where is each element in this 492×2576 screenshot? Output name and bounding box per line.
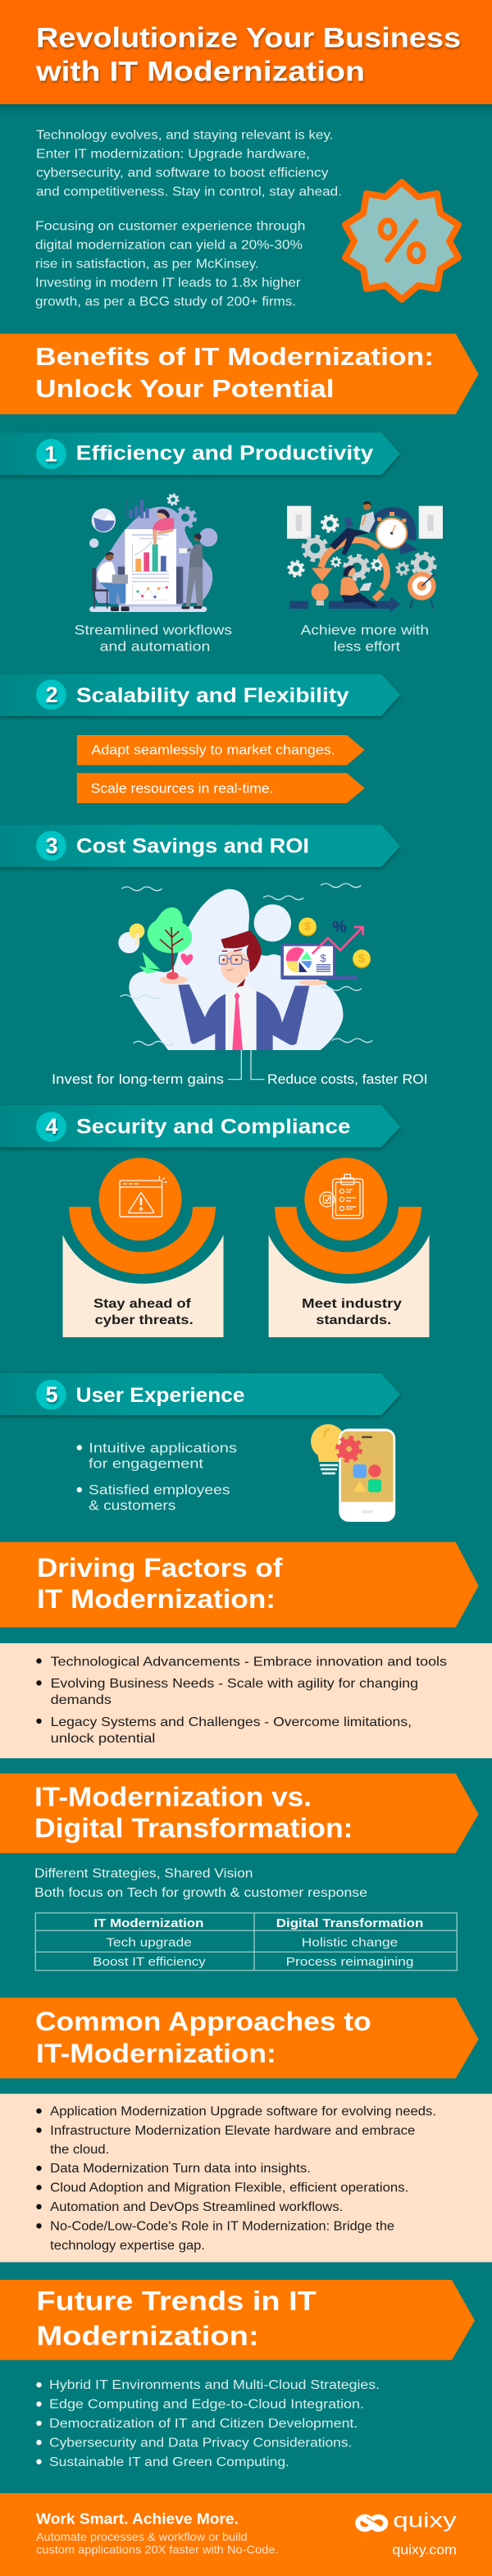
heading: benefits <box>0 334 479 414</box>
panel: common approaches list: Automation and DevOps Streamlined workflows. <box>50 2200 343 2214</box>
comparison intro text: Both focus on Tech for growth & customer response <box>34 1886 367 1900</box>
user experience bullet list <box>77 1441 237 1513</box>
ribbon 1: efficiency and productivity <box>0 432 400 475</box>
user experience bullet list: Satisfied employees <box>89 1483 230 1498</box>
arrow: scale resources <box>77 773 365 803</box>
comparison table: IT Modernization <box>93 1916 203 1930</box>
callout: invest for long-term gains: Invest for long-term gains <box>52 1072 224 1087</box>
heading: driving factors <box>0 1542 479 1628</box>
title: with IT Modernization <box>35 56 365 87</box>
title <box>35 23 461 87</box>
comparison intro text <box>34 1867 367 1900</box>
caption: streamlined workflows: and automation <box>100 638 210 654</box>
ribbon 2: scalability and flexibility: 2 <box>45 683 58 707</box>
arrow: adapt seamlessly: Adapt seamlessly to market changes. <box>91 742 335 758</box>
ribbon 3: cost savings and roi: Cost Savings and ROI <box>76 835 309 858</box>
arrow: adapt seamlessly <box>77 735 365 765</box>
panel: common approaches list: the cloud. <box>50 2143 109 2157</box>
icon: browser warning <box>120 1176 167 1217</box>
panel: driving factors list: demands <box>51 1693 112 1707</box>
panel: common approaches list: Cloud Adoption and Migration Flexible, efficient operations. <box>50 2181 408 2195</box>
heading: it modernization vs digital transformation: Digital Transformation: <box>34 1813 353 1843</box>
intro text block: Focusing on customer experience through <box>35 220 305 234</box>
illustration: businessman balancing investment and returns: $ <box>320 952 326 964</box>
illustration: businessman balancing investment and returns <box>118 884 372 1050</box>
illustration: businessman balancing investment and returns: $ <box>304 920 311 933</box>
ribbon 3: cost savings and roi <box>0 824 400 867</box>
caption: achieve more <box>301 622 429 654</box>
user experience bullet list: Intuitive applications <box>89 1441 237 1455</box>
user experience bullet list: & customers <box>89 1498 175 1513</box>
ribbon 3: cost savings and roi: 3 <box>45 834 58 858</box>
caption: achieve more: Achieve more with <box>301 622 429 637</box>
comparison table: Holistic change <box>302 1936 398 1949</box>
panel: driving factors list: Technological Advancements - Embrace innovation and tools <box>51 1655 447 1669</box>
icon: percent badge <box>345 182 458 299</box>
panel: common approaches list: Data Modernization Turn data into insights. <box>50 2162 311 2176</box>
ribbon 4: security and compliance <box>0 1105 400 1147</box>
heading: driving factors: Driving Factors of <box>37 1553 283 1583</box>
illustration: productivity gears and stopwatch <box>287 501 443 612</box>
title banner <box>0 0 492 121</box>
illustration: team analysing a report <box>89 494 217 612</box>
future trends bullet list: Cybersecurity and Data Privacy Considerations. <box>49 2436 352 2450</box>
ribbon 4: security and compliance: 4 <box>45 1114 58 1139</box>
panel: driving factors list: Legacy Systems and Challenges - Overcome limitations, <box>51 1715 412 1729</box>
callout: reduce costs <box>251 1050 428 1087</box>
card: cyber threats: Stay ahead of <box>93 1297 191 1311</box>
card: industry standards: standards. <box>316 1313 391 1327</box>
ribbon 5: user experience: User Experience <box>76 1384 245 1407</box>
heading: benefits: Benefits of IT Modernization: <box>35 342 434 371</box>
user experience bullet list: for engagement <box>89 1456 203 1471</box>
intro text block: Investing in modern IT leads to 1.8x higher <box>35 276 301 290</box>
future trends bullet list: Sustainable IT and Green Computing. <box>49 2455 289 2469</box>
logo: quixy: quixy <box>393 2510 457 2533</box>
intro text block: cybersecurity, and software to boost efficiency <box>36 166 328 180</box>
panel: driving factors list <box>0 1643 492 1758</box>
illustration: businessman balancing investment and returns: % <box>332 919 347 936</box>
heading: benefits: Unlock Your Potential <box>35 374 335 403</box>
comparison table: Boost IT efficiency <box>93 1955 206 1969</box>
card: cyber threats: cyber threats. <box>95 1313 194 1327</box>
illustration: businessman balancing investment and returns: $ <box>358 952 365 965</box>
future trends bullet list: Edge Computing and Edge-to-Cloud Integration. <box>49 2398 364 2412</box>
footer tagline: Work Smart. Achieve More. <box>36 2510 239 2528</box>
caption: achieve more: less effort <box>334 638 400 654</box>
footer tagline <box>36 2510 279 2555</box>
future trends bullet list: Hybrid IT Environments and Multi-Cloud Strategies. <box>49 2378 380 2392</box>
panel: common approaches list: Infrastructure Modernization Elevate hardware and embrace <box>50 2124 415 2138</box>
card: cyber threats <box>62 1158 223 1337</box>
future trends bullet list: Democratization of IT and Citizen Development. <box>49 2417 358 2431</box>
ribbon 5: user experience: 5 <box>45 1382 58 1407</box>
comparison intro text: Different Strategies, Shared Vision <box>34 1867 253 1881</box>
icon: clipboard checklist <box>320 1175 363 1218</box>
ribbon 2: scalability and flexibility <box>0 674 400 716</box>
comparison table <box>35 1913 457 1971</box>
heading: common approaches: IT-Modernization: <box>36 2039 276 2068</box>
callout: invest for long-term gains <box>52 1050 241 1087</box>
title: Revolutionize Your Business <box>36 23 461 54</box>
arrow: scale resources: Scale resources in real-time. <box>91 781 274 797</box>
intro text block: and competitiveness. Stay in control, stay ahead. <box>36 185 342 199</box>
footer tagline: custom applications 20X faster with No-Code. <box>36 2542 279 2555</box>
panel: common approaches list: No-Code/Low-Code's Role in IT Modernization: Bridge the <box>50 2219 394 2233</box>
intro text block: digital modernization can yield a 20%-30% <box>35 239 303 253</box>
icon: phone with apps and light bulb <box>311 1424 395 1522</box>
intro text block: growth, as per a BCG study of 200+ firms. <box>35 295 296 309</box>
intro text block <box>35 128 342 309</box>
panel: common approaches list: technology expertise gap. <box>50 2239 205 2253</box>
heading: driving factors: IT Modernization: <box>37 1584 276 1614</box>
heading: future trends: Future Trends in IT <box>36 2286 317 2316</box>
caption: streamlined workflows <box>75 622 232 654</box>
heading: common approaches: Common Approaches to <box>35 2007 371 2036</box>
panel: common approaches list <box>0 2094 492 2263</box>
ribbon 5: user experience <box>0 1373 400 1415</box>
comparison table: Digital Transformation <box>276 1916 423 1930</box>
comparison table: Process reimagining <box>286 1955 413 1969</box>
ribbon 1: efficiency and productivity: Efficiency and Productivity <box>76 442 373 465</box>
panel: common approaches list: Application Modernization Upgrade software for evolving needs. <box>50 2104 436 2118</box>
future trends bullet list <box>36 2378 380 2469</box>
comparison table: Tech upgrade <box>106 1936 192 1949</box>
intro text block: Technology evolves, and staying relevant is key. <box>36 128 333 143</box>
logo: quixy <box>358 2510 457 2557</box>
intro text block: Enter IT modernization: Upgrade hardware, <box>36 148 310 161</box>
heading: future trends: Modernization: <box>36 2320 259 2351</box>
ribbon 1: efficiency and productivity: 1 <box>44 441 57 466</box>
ribbon 4: security and compliance: Security and Compliance <box>76 1116 351 1139</box>
footer <box>0 2493 492 2576</box>
heading: common approaches <box>0 1998 479 2078</box>
heading: it modernization vs digital transformation <box>0 1774 479 1853</box>
card: industry standards: Meet industry <box>302 1297 402 1311</box>
heading: it modernization vs digital transformation: IT-Modernization vs. <box>34 1782 312 1811</box>
intro text block: rise in satisfaction, as per McKinsey. <box>35 258 259 272</box>
callout: reduce costs: Reduce costs, faster ROI <box>267 1072 428 1087</box>
logo: quixy: quixy.com <box>392 2542 457 2557</box>
caption: streamlined workflows: Streamlined workflows <box>75 622 232 637</box>
panel: driving factors list: unlock potential <box>51 1732 155 1746</box>
ribbon 2: scalability and flexibility: Scalability and Flexibility <box>76 684 349 707</box>
panel: driving factors list: Evolving Business Needs - Scale with agility for changing <box>51 1677 418 1691</box>
card: industry standards <box>269 1158 430 1337</box>
footer tagline: Automate processes & workflow or build <box>36 2530 248 2543</box>
heading: future trends <box>0 2280 475 2360</box>
